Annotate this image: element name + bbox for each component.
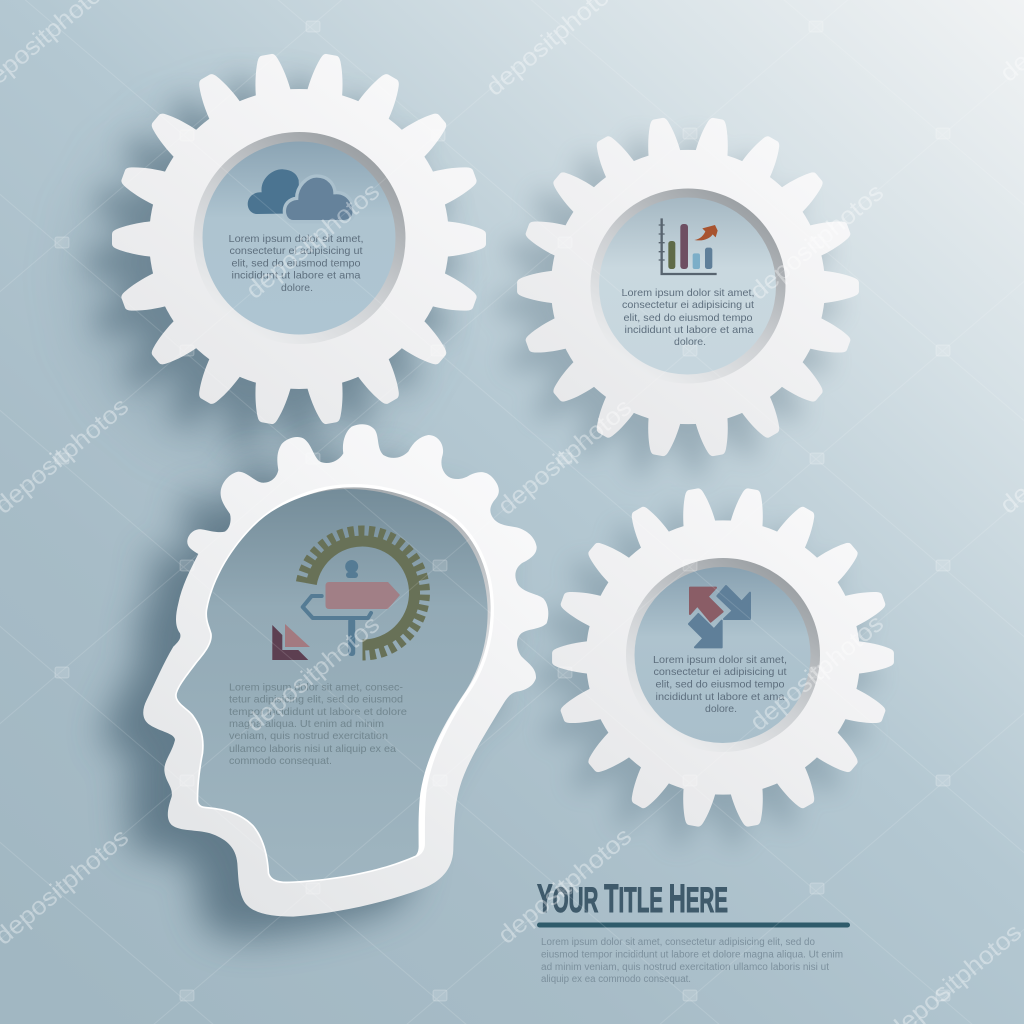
gear 2 text: consectetur ei adipisicing ut <box>622 299 754 311</box>
gear 3 text: dolore. <box>705 703 737 715</box>
head text: veniam, quis nostrud exercitation <box>229 730 388 742</box>
gear 2 text <box>622 287 754 348</box>
gear 1 text: dolore. <box>281 282 313 294</box>
gear 2 inner disc <box>599 198 776 374</box>
icon: three arrows <box>689 586 750 647</box>
icon: cog arc <box>301 531 424 655</box>
description paragraph: ad minim veniam, quis nostrud exercitation ullamco laboris nisi ut <box>541 962 829 973</box>
gear shadows <box>68 75 877 847</box>
gear 2 text: elit, sed do eiusmod tempo <box>624 312 753 324</box>
head text: ullamco laboris nisi ut aliquip ex ea <box>229 743 396 755</box>
gear 1 text: Lorem ipsum dolor sit amet, <box>228 233 364 245</box>
gear 3 inner disc <box>634 567 810 743</box>
icon: signpost <box>303 560 400 656</box>
watermark text: depositphotos <box>241 177 385 305</box>
icon: triangles <box>272 624 310 660</box>
description paragraph <box>541 937 843 985</box>
gear 3 text: incididunt ut labore et ama <box>656 691 785 703</box>
gear 1 text: elit, sed do eiusmod tempo <box>232 258 361 270</box>
description paragraph: aliquip ex ea commodo consequat. <box>541 974 691 985</box>
gear 1 text <box>228 233 364 294</box>
gear 3 text <box>653 654 787 715</box>
watermark text: depositphotos <box>493 393 637 521</box>
head silhouette with gear teeth <box>143 424 548 917</box>
gear 1 text: incididunt ut labore et ama <box>232 270 361 282</box>
head gear panel <box>143 424 548 917</box>
icon: bar chart <box>659 218 718 274</box>
gear 1 text: consectetur ei adipisicing ut <box>230 245 363 257</box>
title: YOUR TITLE HERE <box>537 877 728 921</box>
gear 3 text: Lorem ipsum dolor sit amet, <box>653 654 787 666</box>
head text <box>229 682 407 767</box>
head text: tempor incididunt ut labore et dolore <box>229 706 407 718</box>
gear 2 text: dolore. <box>674 336 706 348</box>
gear 2: bar chart panel <box>514 113 862 461</box>
gear 3: arrows panel <box>549 484 897 831</box>
head text: Lorem ipsum dolor sit amet, consec- <box>229 682 404 694</box>
head shadow <box>103 446 508 939</box>
gear 3 text: elit, sed do eiusmod tempo <box>656 678 785 690</box>
description paragraph: eiusmod tempor incididunt ut labore et dolore magna aliqua. Ut enim <box>541 950 843 961</box>
watermark text: depositphotos <box>493 822 637 950</box>
icon: clouds <box>248 169 354 222</box>
gear 2 text: Lorem ipsum dolor sit amet, <box>622 287 754 299</box>
watermark text: depositphotos <box>745 609 889 737</box>
head text: commodo consequat. <box>229 755 332 767</box>
watermark text: depositphotos <box>745 178 889 306</box>
head text: magna aliqua. Ut enim ad minim <box>229 718 384 730</box>
gear 1: cloud panel <box>109 49 489 429</box>
gear 3 text: consectetur ei adipisicing ut <box>654 666 787 678</box>
description paragraph: Lorem ipsum dolor sit amet, consectetur adipisicing elit, sed do <box>541 937 815 948</box>
gear 2 text: incididunt ut labore et ama <box>624 324 754 336</box>
watermark text: depositphotos <box>241 610 385 738</box>
gear 1 inner disc <box>202 142 396 334</box>
head text: tetur adipisicing elit, sed do eiusmod <box>229 694 403 706</box>
title rule <box>537 922 850 928</box>
